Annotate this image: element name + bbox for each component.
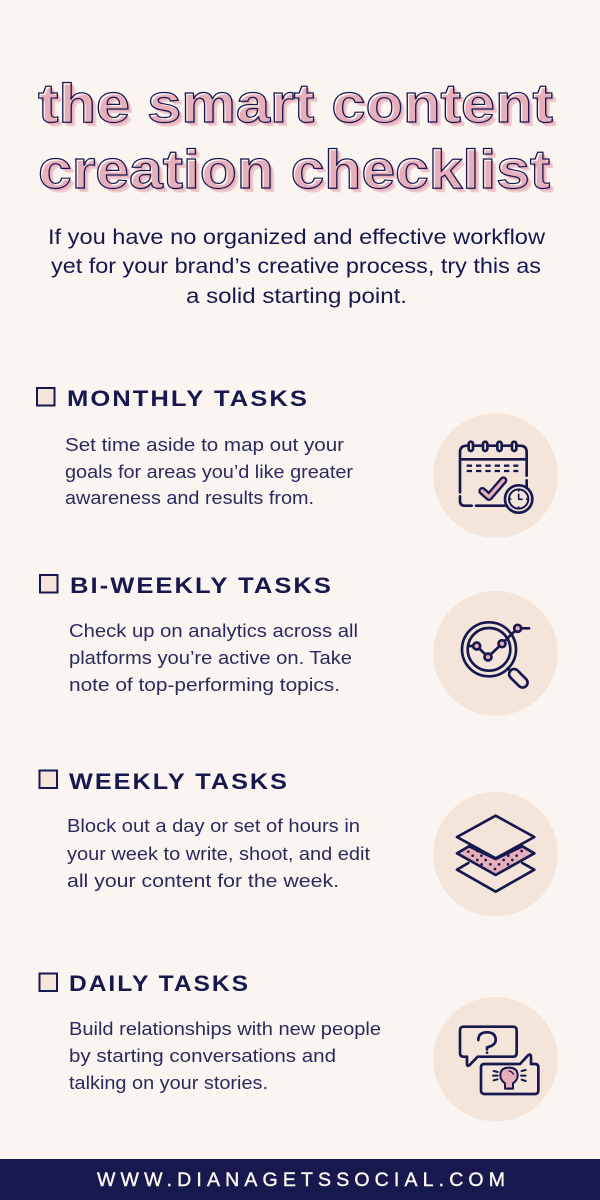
intro text xyxy=(48,225,546,308)
text: weekly description: your week to write, shoot, and edit xyxy=(67,844,370,864)
footer url: WWW.DIANAGETSSOCIAL.COM xyxy=(97,1169,505,1191)
icon: calendar with check and clock xyxy=(433,413,558,538)
text: bi-weekly description: note of top-performing topics. xyxy=(69,675,340,695)
heading: bi-weekly tasks: BI-WEEKLY TASKS xyxy=(70,573,333,598)
title: creation checklist xyxy=(42,142,554,204)
title: the smart content xyxy=(40,74,555,136)
text: monthly description: goals for areas you’d like greater xyxy=(65,462,353,482)
checkbox: monthly xyxy=(37,388,54,406)
intro text: a solid starting point. xyxy=(186,284,407,308)
text: daily description: Build relationships with new people xyxy=(69,1019,381,1039)
text: daily description xyxy=(69,1019,381,1093)
text: weekly description: Block out a day or set of hours in xyxy=(67,816,360,836)
text: monthly description: awareness and results from. xyxy=(65,488,314,508)
checkbox: weekly xyxy=(40,770,57,788)
panel: daily tasks xyxy=(40,971,558,1121)
text: weekly description: all your content for the week. xyxy=(67,871,339,891)
heading: daily tasks: DAILY TASKS xyxy=(69,971,250,996)
icon: stacked layers xyxy=(433,792,558,916)
text: monthly description: Set time aside to map out your xyxy=(65,435,344,455)
panel: bi-weekly tasks xyxy=(40,573,558,716)
title: creation checklist xyxy=(38,138,550,200)
footer bar xyxy=(0,1159,600,1200)
checkbox: daily xyxy=(40,974,57,991)
text: bi-weekly description xyxy=(69,621,358,695)
heading: weekly tasks: WEEKLY TASKS xyxy=(69,769,289,794)
intro text: yet for your brand’s creative process, try this as xyxy=(51,254,541,278)
checkbox: bi-weekly xyxy=(40,575,58,592)
title xyxy=(38,72,557,204)
icon: speech bubbles with question mark and light bulb xyxy=(433,997,558,1121)
text: bi-weekly description: platforms you’re active on. Take xyxy=(69,648,352,668)
text: monthly description xyxy=(65,435,353,508)
text: bi-weekly description: Check up on analytics across all xyxy=(69,621,358,641)
icon: magnifying glass over line chart xyxy=(433,591,558,716)
panel: monthly tasks xyxy=(37,386,558,538)
title: creation checklist xyxy=(40,140,552,202)
text: daily description: talking on your stories. xyxy=(69,1073,268,1093)
intro text: If you have no organized and effective workflow xyxy=(48,225,546,249)
panel: weekly tasks xyxy=(40,769,558,916)
text: weekly description xyxy=(67,816,370,891)
title: the smart content xyxy=(42,76,557,138)
title: the smart content xyxy=(38,72,553,134)
text: daily description: by starting conversations and xyxy=(69,1046,336,1066)
heading: monthly tasks: MONTHLY TASKS xyxy=(67,386,309,411)
